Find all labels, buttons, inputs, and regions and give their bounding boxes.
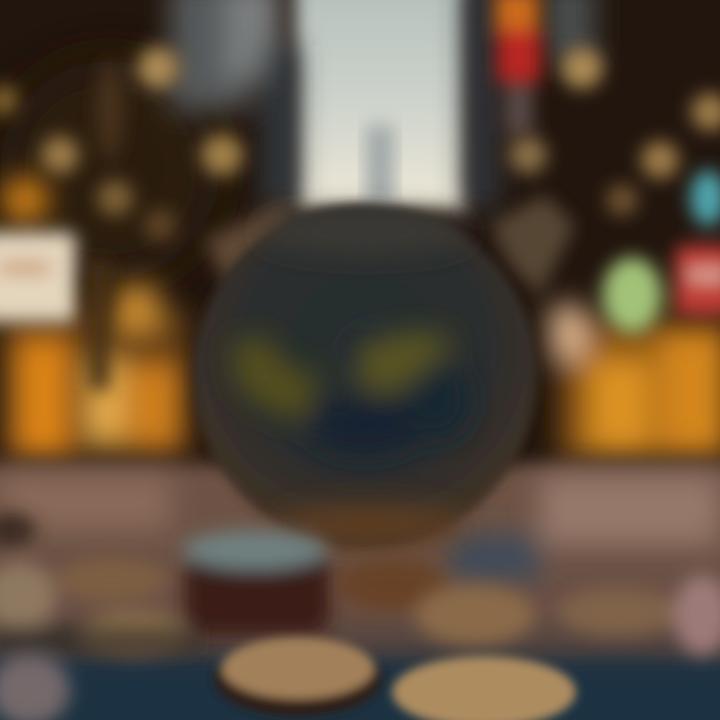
background: distant tower: [366, 125, 394, 210]
left shops: orange storefront glow: [0, 176, 190, 460]
right shops: orange storefront glow: [550, 305, 720, 460]
coin: front centre: [214, 637, 382, 716]
coin: left: [0, 512, 200, 720]
globe: continents: [230, 212, 470, 545]
ground: reflective street: [0, 464, 720, 720]
coin: front right: [392, 656, 576, 720]
banner: red and orange sign: [495, 0, 541, 135]
string lights: left tree: [0, 47, 295, 390]
string lights: right tree: [490, 47, 720, 295]
ground highlights: [0, 475, 720, 580]
background: sky: [295, 0, 467, 210]
globe: dark sphere: [193, 204, 537, 548]
background: skyscrapers: [170, 0, 595, 210]
coin: right: [336, 559, 720, 655]
coins: stacked coins under the globe: [0, 512, 720, 720]
ground: bottom blue table: [0, 660, 720, 720]
right signs: green, red and blue boards: [602, 170, 720, 333]
coin: centre stack: [183, 530, 330, 635]
left sign: white shop board: [0, 232, 76, 322]
